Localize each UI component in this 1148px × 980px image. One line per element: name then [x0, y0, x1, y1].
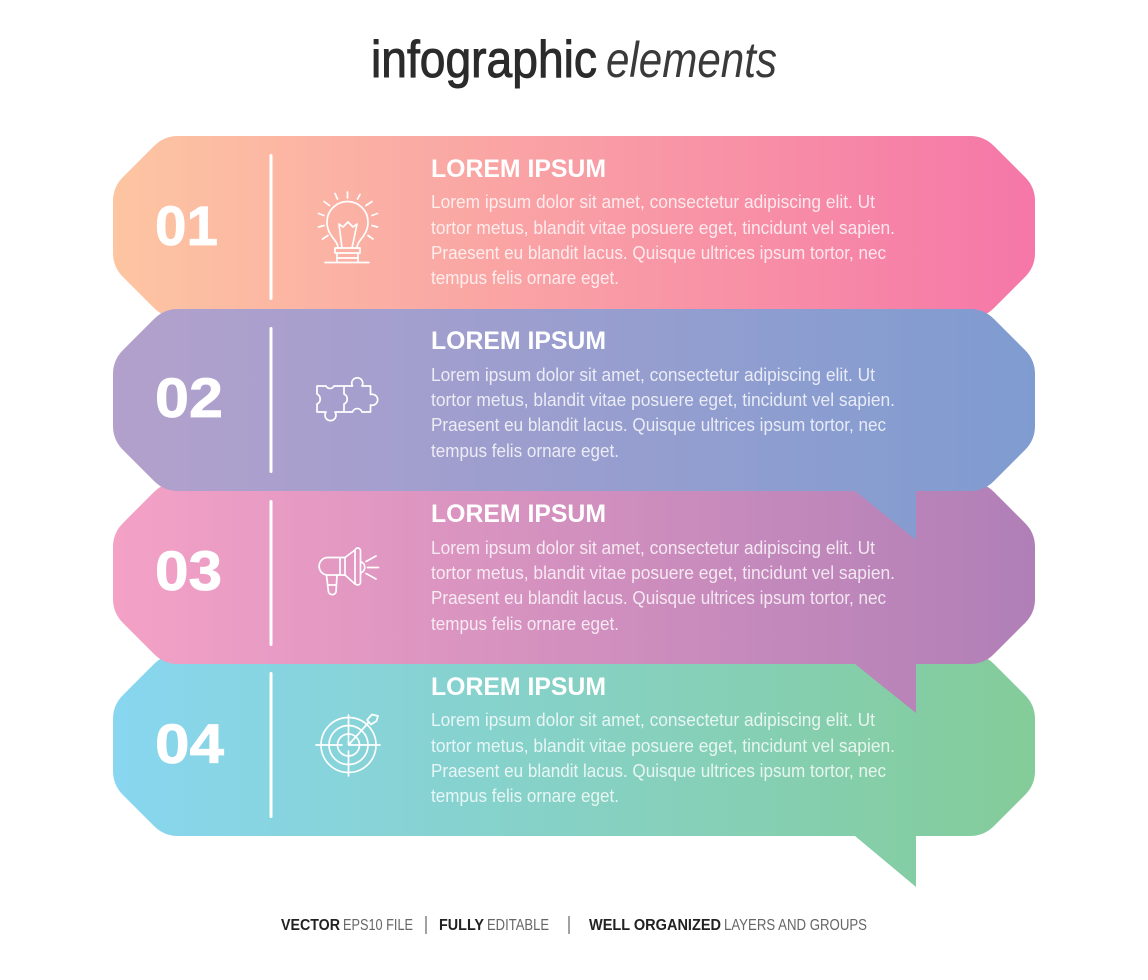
- footer: FULLY: [439, 917, 484, 934]
- panel: step 02: [113, 309, 1035, 540]
- body text 01: Praesent eu blandit lacus. Quisque ultrices ipsum tortor, nec: [431, 243, 886, 263]
- heading 02: LOREM IPSUM: [431, 327, 606, 355]
- body text 01: Lorem ipsum dolor sit amet, consectetur adipiscing elit. Ut: [431, 192, 875, 212]
- divider 02: [270, 327, 272, 473]
- number 03: 03: [155, 539, 222, 602]
- body text 03: tortor metus, blandit vitae posuere eget, tincidunt vel sapien.: [431, 563, 895, 583]
- number 02: 02: [155, 366, 223, 429]
- body text 04: tortor metus, blandit vitae posuere eget, tincidunt vel sapien.: [431, 736, 895, 756]
- footer: VECTOR: [281, 917, 340, 934]
- band 03 background with tail: [113, 482, 1035, 713]
- body text 03: [431, 538, 895, 634]
- body text 01: tortor metus, blandit vitae posuere eget, tincidunt vel sapien.: [431, 218, 895, 238]
- divider 04: [270, 672, 272, 818]
- body text 04: Praesent eu blandit lacus. Quisque ultrices ipsum tortor, nec: [431, 761, 886, 781]
- number 01: 01: [155, 194, 218, 257]
- body text 03: tempus felis ornare eget.: [431, 614, 619, 634]
- footer: [281, 916, 867, 934]
- footer: WELL ORGANIZED: [589, 917, 721, 934]
- body text 01: [431, 192, 895, 288]
- heading 04: LOREM IPSUM: [431, 673, 606, 701]
- body text 04: Lorem ipsum dolor sit amet, consectetur adipiscing elit. Ut: [431, 710, 875, 730]
- footer: LAYERS AND GROUPS: [724, 917, 867, 934]
- body text 01: tempus felis ornare eget.: [431, 268, 619, 288]
- icon: light bulb: [318, 192, 378, 262]
- panel: step 03: [113, 482, 1035, 713]
- panel: step 04: [113, 654, 1035, 887]
- body text 02: [431, 365, 895, 461]
- footer: EDITABLE: [487, 917, 549, 934]
- icon: megaphone: [319, 548, 378, 595]
- band 02 background with tail: [113, 309, 1035, 540]
- body text 04: [431, 710, 895, 806]
- band 04 background with tail: [113, 654, 1035, 887]
- body text 03: Praesent eu blandit lacus. Quisque ultrices ipsum tortor, nec: [431, 588, 886, 608]
- body text 03: Lorem ipsum dolor sit amet, consectetur adipiscing elit. Ut: [431, 538, 875, 558]
- icon: puzzle: [317, 378, 378, 421]
- body text 02: tempus felis ornare eget.: [431, 441, 619, 461]
- divider 03: [270, 500, 272, 646]
- band 01 background: [113, 136, 1035, 318]
- title: [371, 31, 777, 89]
- body text 02: Lorem ipsum dolor sit amet, consectetur adipiscing elit. Ut: [431, 365, 875, 385]
- body text 02: Praesent eu blandit lacus. Quisque ultrices ipsum tortor, nec: [431, 415, 886, 435]
- panel: step 01: [113, 136, 1035, 318]
- heading 03: LOREM IPSUM: [431, 500, 606, 528]
- icon: target: [316, 714, 380, 776]
- divider 01: [270, 154, 272, 300]
- footer: EPS10 FILE: [343, 917, 413, 934]
- title: infographic: [371, 31, 597, 89]
- heading 01: LOREM IPSUM: [431, 155, 606, 183]
- number 04: 04: [155, 712, 224, 775]
- body text 04: tempus felis ornare eget.: [431, 786, 619, 806]
- title: elements: [606, 32, 777, 88]
- body text 02: tortor metus, blandit vitae posuere eget, tincidunt vel sapien.: [431, 390, 895, 410]
